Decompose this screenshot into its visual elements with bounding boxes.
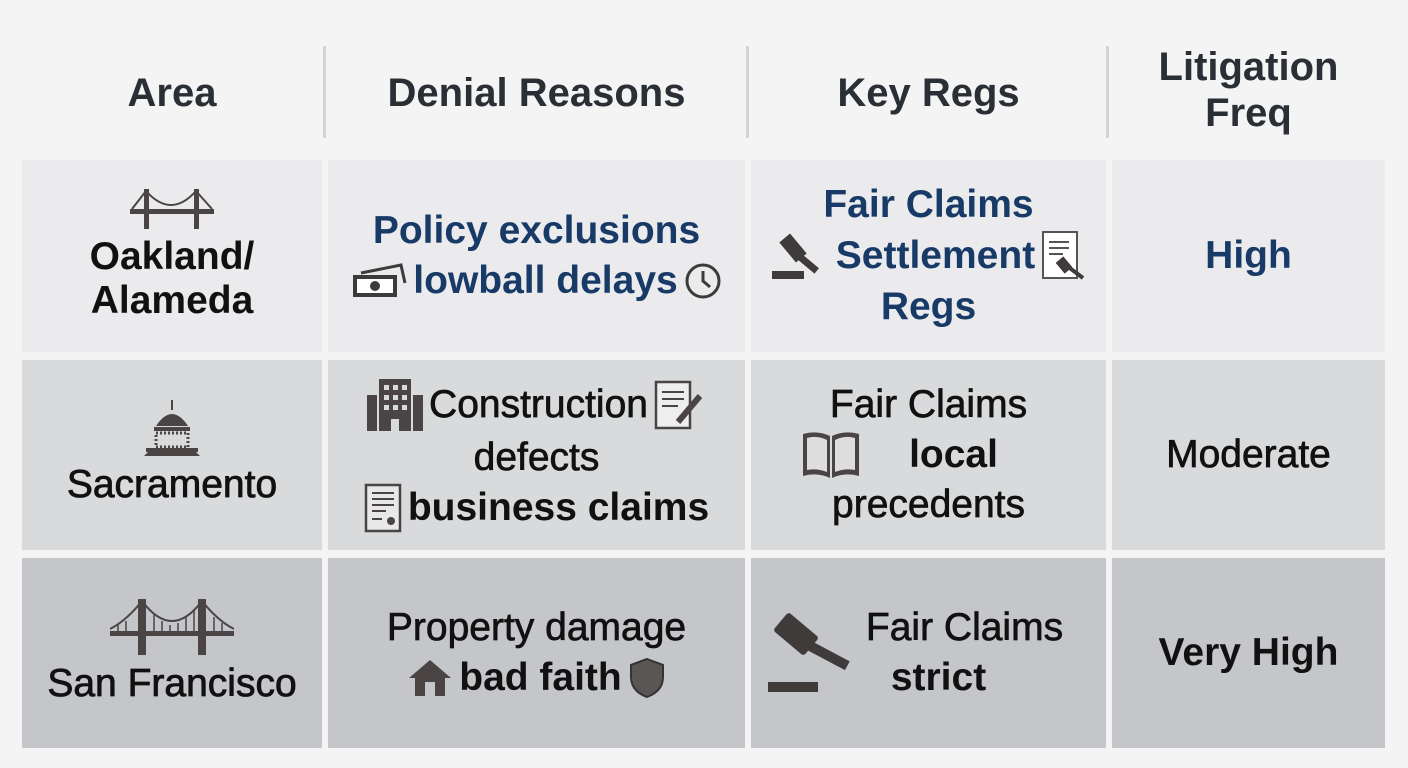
row 1 area: Oakland/Alameda: Oakland/ (90, 235, 254, 278)
row 3 area: San Francisco (22, 558, 322, 748)
row 1 denial: Policy exclusions (373, 209, 700, 252)
header: Denial Reasons: Denial Reasons (388, 71, 685, 115)
row 1 area: Oakland/Alameda (22, 160, 322, 352)
row 2 regs: precedents (832, 483, 1025, 526)
icon: money (353, 263, 406, 297)
icon: golden gate bridge (110, 599, 234, 655)
icon: book (803, 432, 859, 478)
icon: gavel (772, 234, 819, 279)
icon: certificate (364, 484, 402, 532)
row 1 denial (328, 160, 745, 352)
row 1 freq: High: High (1205, 234, 1292, 277)
row 3 area: San Francisco: San Francisco (47, 662, 297, 705)
row 3 denial: bad faith (459, 656, 622, 699)
icon: shield (630, 658, 664, 698)
row 2 denial (328, 360, 745, 550)
row 2 freq: Moderate (1112, 360, 1385, 550)
row 2 regs: Fair Claims (830, 383, 1027, 426)
icon: building (367, 379, 423, 431)
header: Litigation Freq: Freq (1205, 91, 1292, 135)
row 1 freq: High (1112, 160, 1385, 352)
row 1 regs (751, 160, 1106, 352)
header: Litigation Freq: Litigation (1159, 45, 1338, 89)
icon: bridge (130, 189, 214, 229)
row 2 denial: Construction (429, 383, 648, 426)
row 2 denial: business claims (408, 486, 709, 529)
header: Key Regs: Key Regs (837, 71, 1020, 115)
row 3 freq: Very High (1112, 558, 1385, 748)
row 3 denial (328, 558, 745, 748)
row 2 regs (751, 360, 1106, 550)
row 2 denial: defects (474, 436, 599, 479)
row 1 regs: Settlement (836, 234, 1035, 277)
icon: document pen (654, 380, 702, 430)
icon: large gavel (768, 613, 850, 692)
row 1 area: Oakland/Alameda: Alameda (91, 279, 253, 322)
row 2 area: Sacramento: Sacramento (67, 463, 277, 506)
row 3 denial: Property damage (387, 606, 686, 649)
row 3 regs (751, 558, 1106, 748)
icon: clock (686, 264, 720, 298)
icon: document gavel (1042, 231, 1084, 280)
row 1 denial: lowball delays (413, 259, 678, 302)
row 2 area: Sacramento (22, 360, 322, 550)
row 2 regs: local (909, 433, 998, 476)
header: Area: Area (128, 71, 216, 115)
row 1 regs: Regs (881, 285, 976, 328)
icon: capitol (144, 400, 200, 456)
row 1 regs: Fair Claims (823, 183, 1034, 226)
row 3 freq: Very High: Very High (1159, 631, 1338, 674)
row 2 freq: Moderate: Moderate (1166, 433, 1331, 476)
row 3 regs: strict (891, 656, 986, 699)
row 3 regs: Fair Claims (866, 606, 1063, 649)
header: Litigation Freq (1159, 45, 1338, 135)
icon: house (409, 660, 451, 696)
